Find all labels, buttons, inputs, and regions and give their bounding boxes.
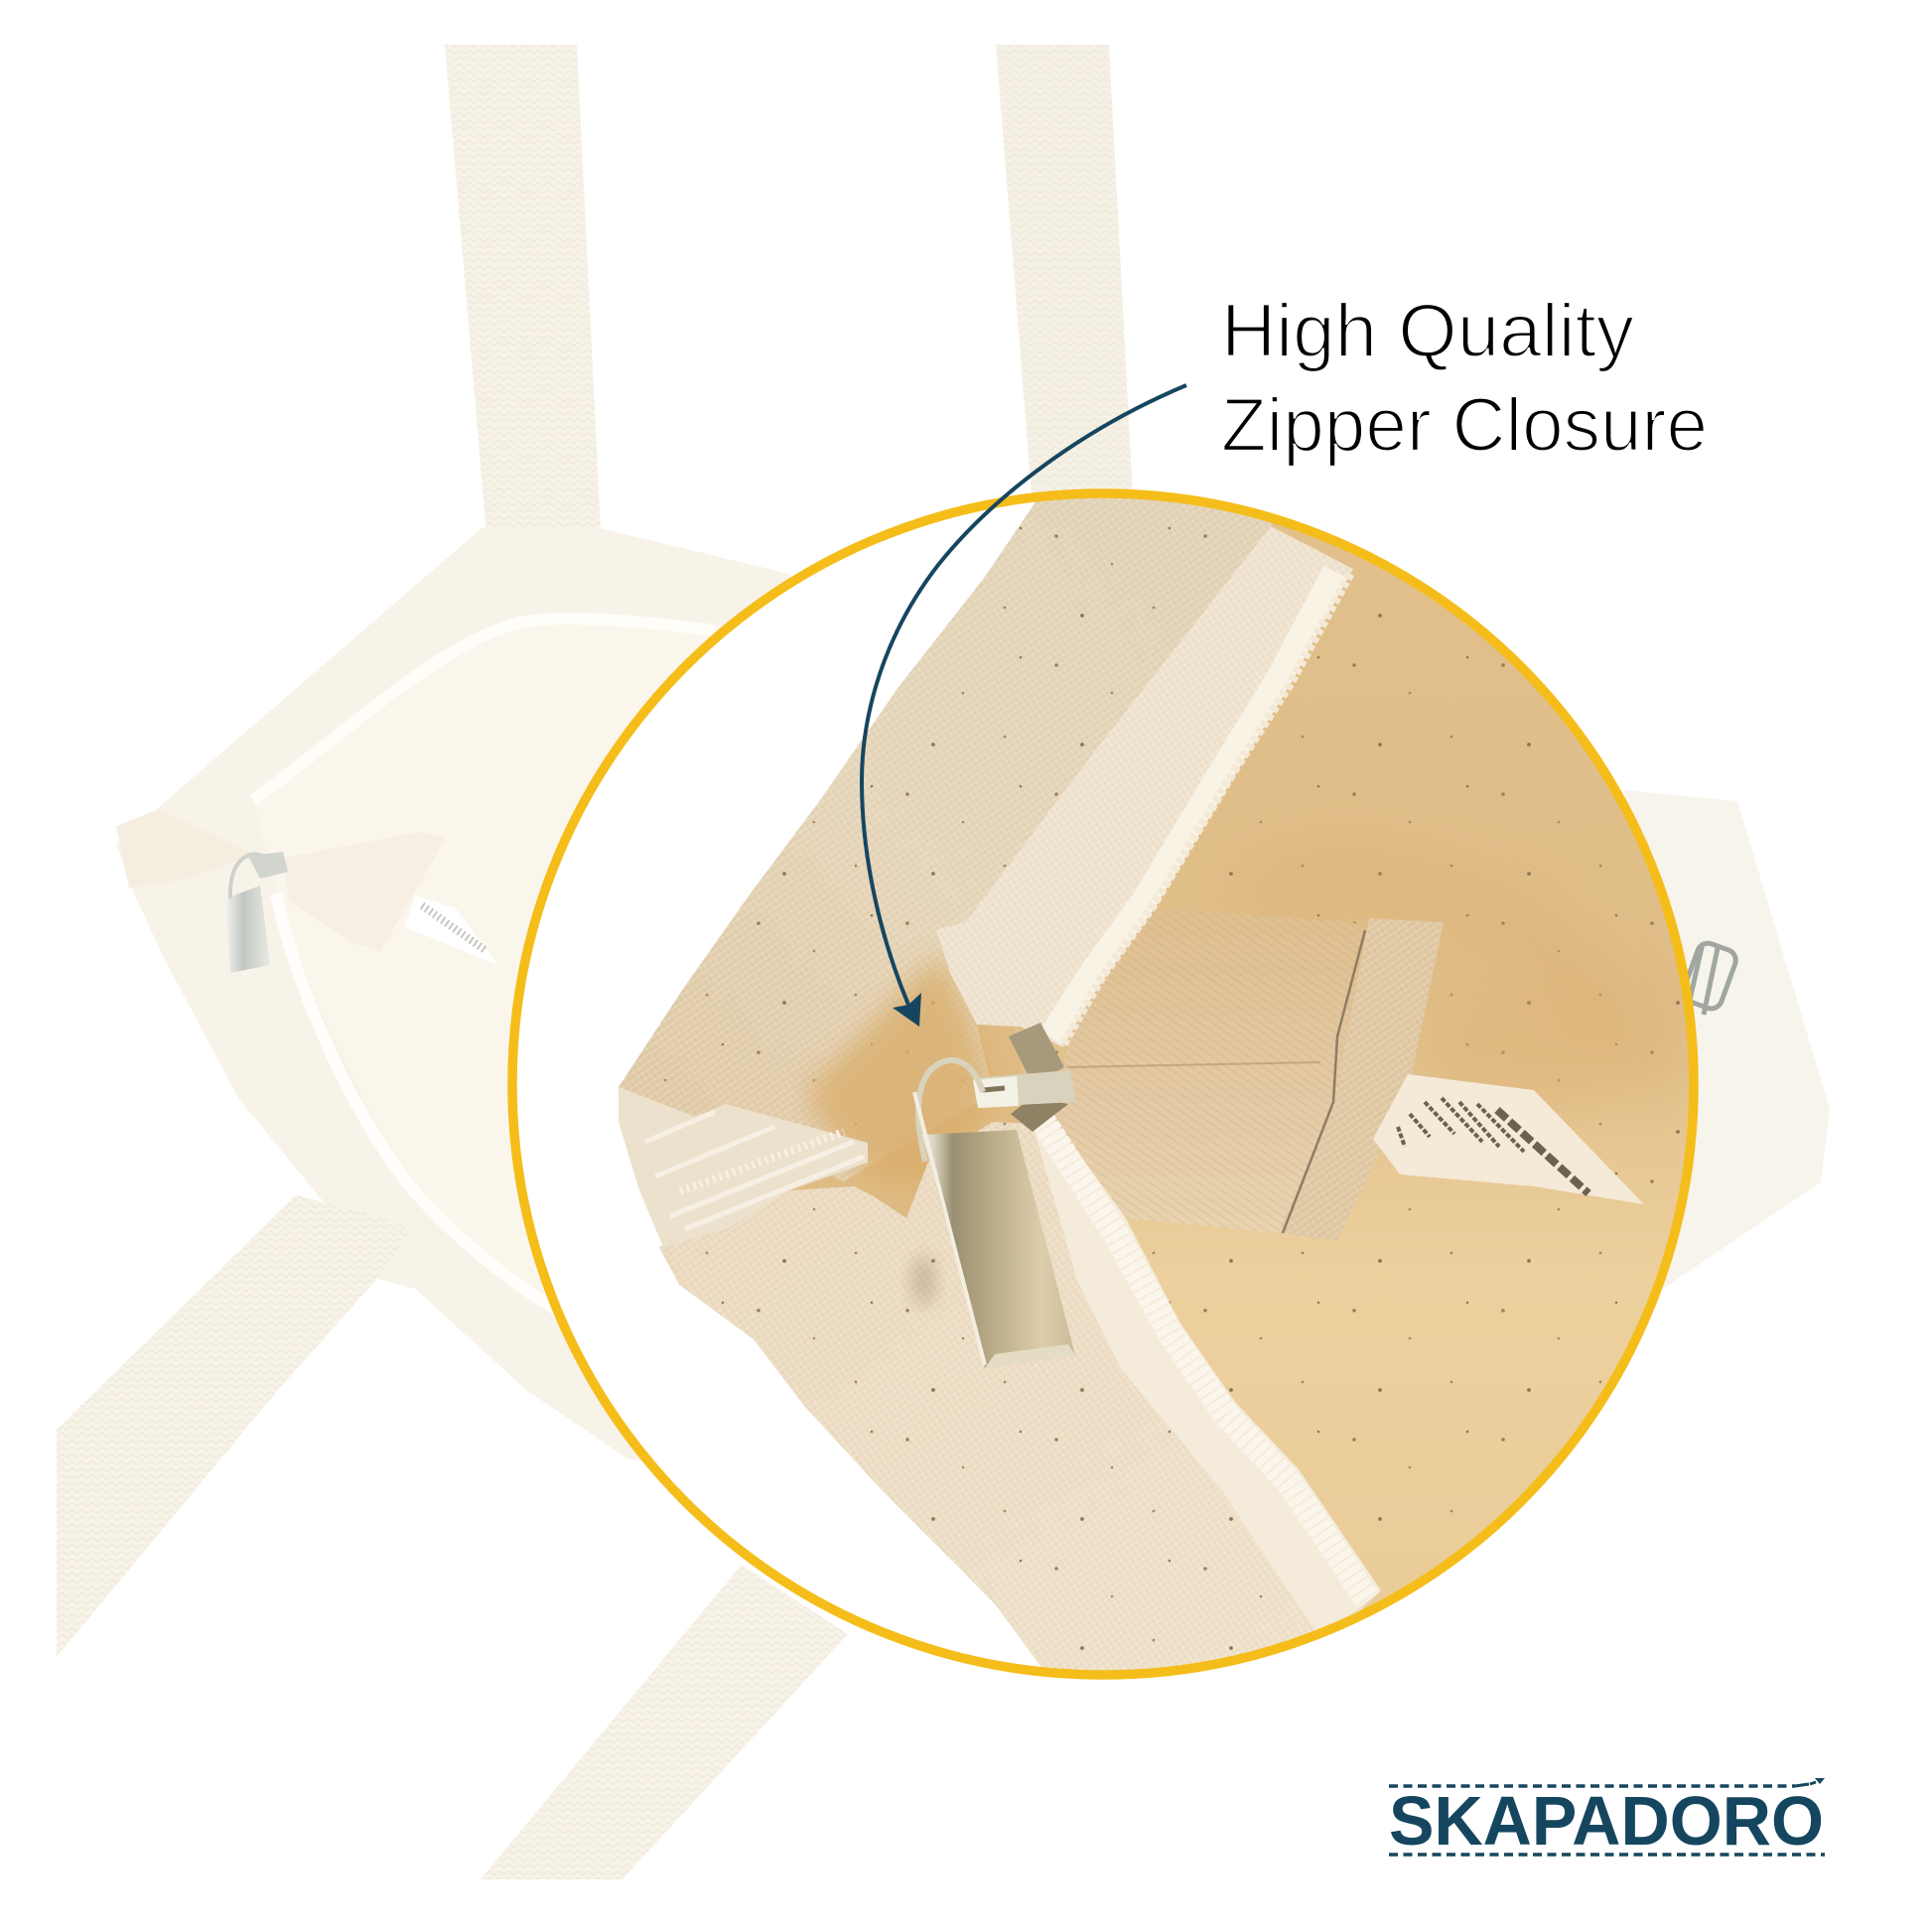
- care label: [1373, 1074, 1644, 1204]
- strap: back right: [996, 45, 1133, 506]
- arrow curve: [862, 385, 1186, 1005]
- callout arrow: [862, 385, 1186, 1027]
- tab hem: [1279, 918, 1444, 1241]
- yellow corner shade: [804, 953, 993, 1191]
- logo dashed top line: [1389, 1784, 1795, 1788]
- callout heading: Zipper Closure: [1221, 383, 1708, 468]
- circle white base: [512, 493, 1694, 1675]
- bag body: outer canvas: [116, 528, 894, 1469]
- zipper teeth: [1050, 572, 1335, 1037]
- frayed corner: [116, 809, 253, 889]
- logo dashed bottom line: [1389, 1853, 1825, 1857]
- inner twill tab: [1052, 908, 1365, 1233]
- logo wordmark: SKAPADORO: [1389, 1782, 1824, 1860]
- strap: back left: [445, 45, 635, 608]
- printed logo on side: [1681, 940, 1738, 1015]
- callout heading: High Quality: [1221, 289, 1634, 373]
- bag body: interior: [253, 617, 794, 1330]
- zipper line: upper: [253, 619, 715, 800]
- inner tab: [284, 832, 446, 952]
- brand logo: [1389, 1778, 1825, 1860]
- zoom circle: [512, 477, 1708, 1688]
- frayed canvas fold: [619, 1087, 868, 1247]
- upper zipper tape: [936, 526, 1353, 1047]
- zipper slider: [973, 1023, 1076, 1132]
- bag side, right of the circle: [1624, 790, 1830, 1311]
- centre underlay: [788, 930, 1023, 1218]
- upper outer canvas band: [619, 477, 1291, 1181]
- strap: front left: [57, 1195, 536, 1657]
- magnified photo: [619, 477, 1708, 1688]
- label printed text: [1398, 1098, 1588, 1193]
- zipper line: lower: [276, 894, 566, 1315]
- care label: [405, 896, 498, 965]
- lower outer canvas band: [659, 1122, 1381, 1688]
- interior shading: [1302, 865, 1667, 1100]
- zipper pull tab: [914, 1060, 1075, 1368]
- logo needle tail: [1795, 1778, 1825, 1786]
- small zipper pull: [225, 852, 288, 973]
- interior canvas: [1021, 522, 1690, 1610]
- strap: front bottom: [481, 1565, 848, 1879]
- lower zipper tape: [1033, 1110, 1381, 1638]
- arrow head: [893, 993, 921, 1027]
- yellow circle outline: [512, 493, 1694, 1675]
